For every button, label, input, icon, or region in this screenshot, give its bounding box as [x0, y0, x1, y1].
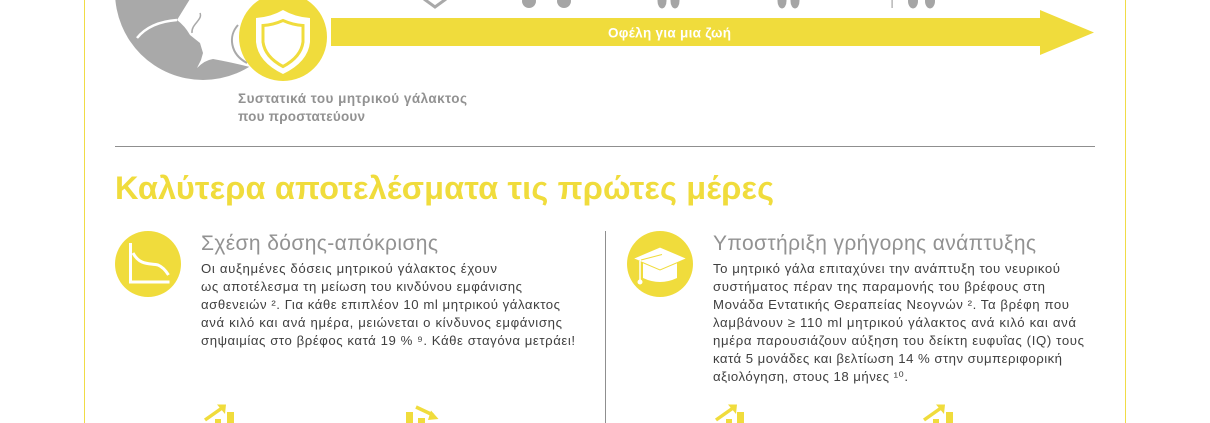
icon: increase chart [205, 404, 234, 423]
icon: increase chart [716, 404, 744, 423]
icon: top cropped chevron [424, 0, 446, 7]
panel: rapid development [627, 231, 1084, 423]
body text [713, 261, 1084, 384]
body text: συστήματος πέραν της παραμονής του βρέφους στη [713, 279, 1045, 294]
icon: protective shield [239, 0, 327, 81]
body text: σηψαιμίας στο βρέφος κατά 19 % ⁹. Κάθε σταγόνα μετράει! [201, 333, 575, 348]
caption: protective components [238, 91, 467, 124]
icon: graduation cap [627, 231, 693, 297]
panel: dose response [115, 231, 575, 423]
caption: protective components: που προστατεύουν [238, 109, 365, 124]
icon: increase chart [924, 404, 953, 423]
icon: mother and baby silhouette [115, 0, 300, 80]
icon: dose response curve [115, 231, 181, 297]
body text: κατά 5 μονάδες και βελτίωση 14 % στην συμπεριφορική [713, 351, 1062, 366]
body text: λαμβάνουν ≥ 110 ml μητρικού γάλακτος ανά κιλό και ανά [713, 315, 1076, 330]
body text: Οι αυξημένες δόσεις μητρικού γάλακτος έχουν [201, 261, 497, 276]
body text: Μονάδα Εντατικής Θεραπείας Νεογνών ². Τα βρέφη που [713, 297, 1069, 312]
body text: ασθενειών ². Για κάθε επιπλέον 10 ml μητρικού γάλακτος [201, 297, 560, 312]
subheading: Υποστήριξη γρήγορης ανάπτυξης [713, 232, 1036, 255]
arrow: lifelong benefits: Οφέλη για μια ζωή [608, 26, 731, 40]
body text: ως αποτέλεσμα τη μείωση του κινδύνου εμφάνισης [201, 279, 522, 294]
body text: ημέρα παρουσιάζουν αύξηση του δείκτη ευφυΐας (IQ) τους [713, 333, 1084, 348]
body text: αξιολόγηση, στους 18 μήνες ¹⁰. [713, 369, 908, 384]
caption: protective components: Συστατικά του μητρικού γάλακτος [238, 91, 467, 106]
heading: Καλύτερα αποτελέσματα τις πρώτες μέρες [115, 170, 774, 206]
icon: decrease chart [406, 407, 438, 423]
body text [201, 261, 575, 348]
arrow: lifelong benefits [331, 10, 1094, 55]
icons: top cropped grey figures [522, 0, 935, 8]
body text: ανά κιλό και ανά ημέρα, μειώνεται ο κίνδυνος εμφάνισης [201, 315, 562, 330]
subheading: Σχέση δόσης-απόκρισης [201, 232, 438, 255]
body text: Το μητρικό γάλα επιταχύνει την ανάπτυξη του νευρικού [713, 261, 1060, 276]
